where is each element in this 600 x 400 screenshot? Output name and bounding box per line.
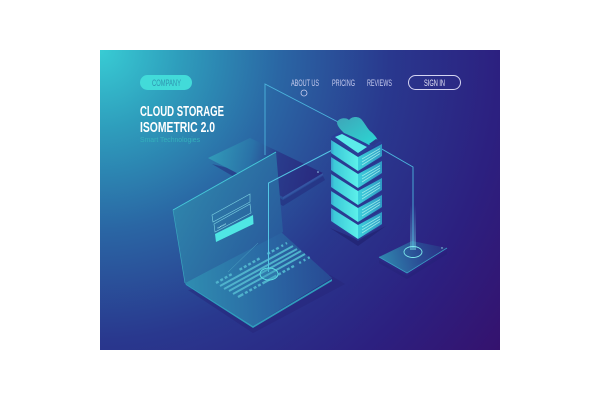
icon: tablet [208,138,325,206]
login form [212,194,254,242]
connector: server to phone [380,148,416,250]
icon: cloud [337,117,378,145]
server top [331,130,382,156]
company badge [140,75,192,90]
title: ISOMETRIC 2.0 [140,120,215,136]
icon: laptop [173,152,345,333]
company badge: COMPANY [152,78,181,88]
icon: server rack [330,117,386,246]
laptop ring [260,268,278,280]
background panel [100,50,500,350]
laptop shadow [188,275,345,333]
keyboard [216,243,310,297]
laptop base [185,232,332,326]
hinge [228,243,258,272]
sign in button [408,76,460,90]
sign in button: SIGN IN [424,78,445,89]
navigation menu: REVIEWS [367,78,392,89]
subtitle: Smart Technologies [140,135,200,144]
login form: ••••••• [216,221,228,230]
phone ring [404,246,422,258]
title: CLOUD STORAGE [140,104,224,120]
navigation menu: PRICING [332,78,355,89]
server shadow [330,226,386,246]
connector: tablet to top [265,84,340,155]
laptop screen [173,152,283,283]
navigation menu: ABOUT US [291,78,319,89]
title [140,104,224,136]
icon: smartphone [379,241,447,279]
navigation menu [291,78,392,96]
connector: laptop to server [268,146,340,272]
rack units [331,206,382,241]
